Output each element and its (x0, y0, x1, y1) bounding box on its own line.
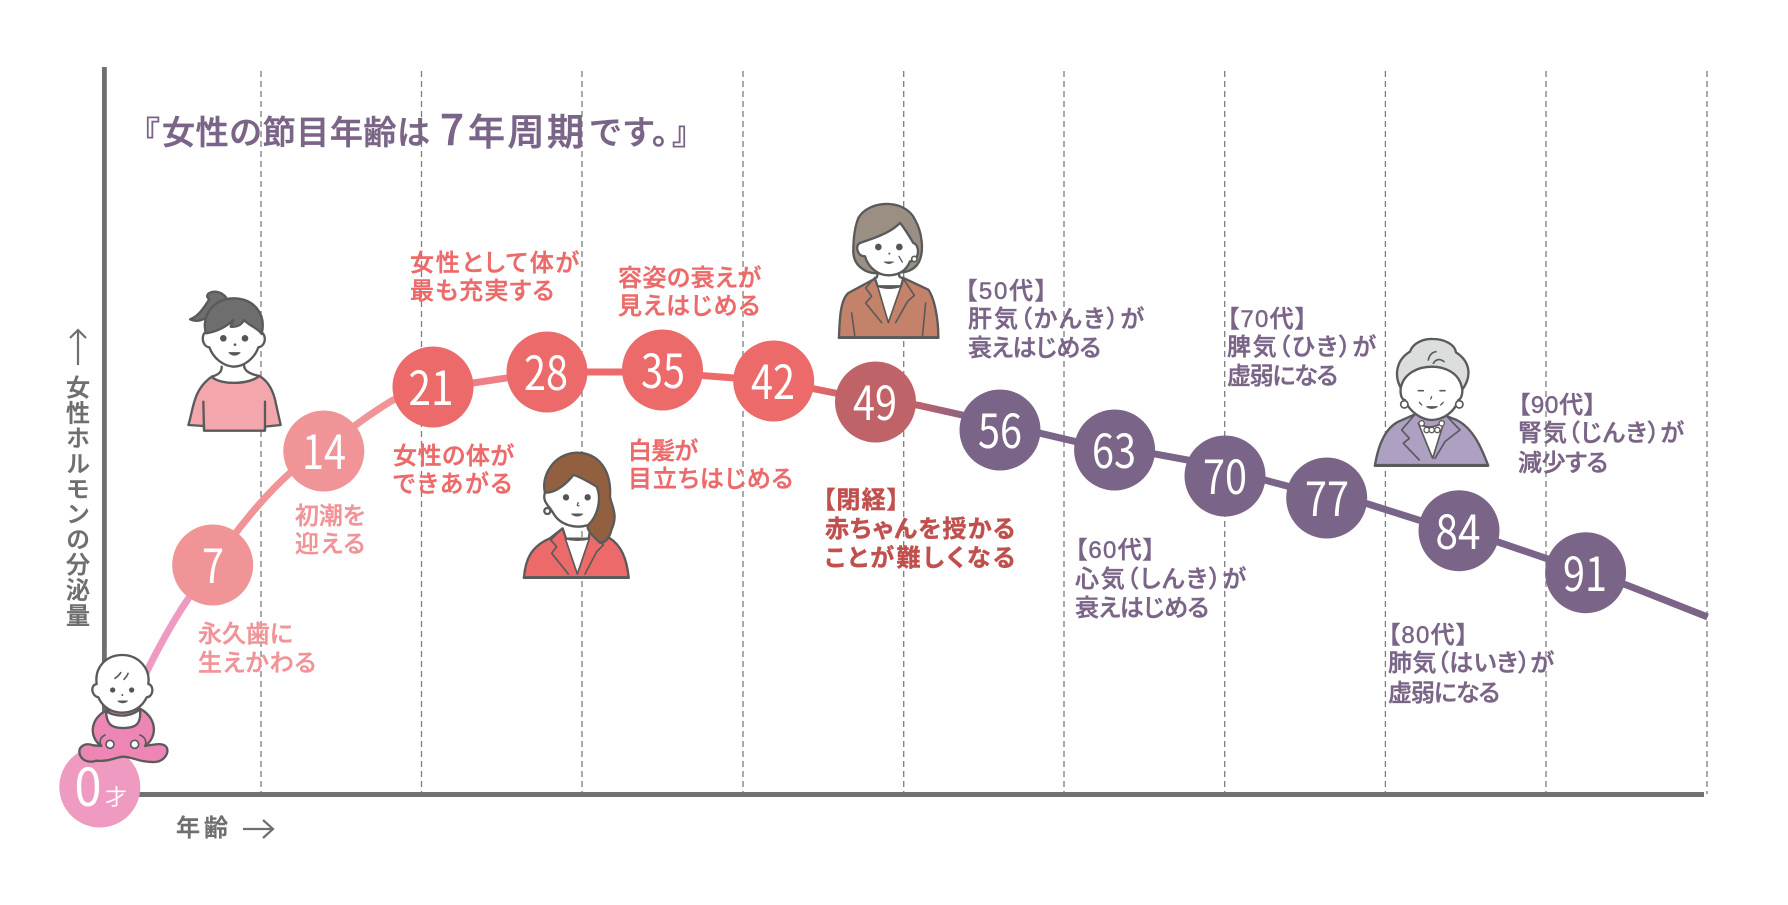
label: 50s (965, 278, 1144, 362)
age 0 node (59, 746, 140, 828)
icon: baby (79, 655, 167, 762)
age 49 node (835, 362, 916, 442)
icon: girl (188, 292, 281, 431)
age 0 node: 0 (74, 746, 102, 821)
age 35 node: 35 (641, 333, 685, 402)
hormone curve (99, 372, 1708, 787)
age 7 node: 7 (202, 528, 224, 597)
age 14 node: 14 (302, 414, 346, 483)
label: menopause: ことが難しくなる (825, 544, 1015, 572)
age 21 node (392, 346, 474, 428)
label: 80s: 【80代】 (1388, 622, 1468, 649)
x axis label: 年齢 (176, 808, 228, 843)
age 28 node: 28 (524, 335, 568, 404)
label: 60s: 【60代】 (1075, 537, 1155, 564)
label: 60s (1075, 537, 1246, 622)
age 49 node: 49 (853, 365, 897, 434)
label: 70s: 虚弱になる (1227, 363, 1338, 390)
age 70 node (1184, 436, 1266, 516)
label: age 35 bottom (628, 438, 793, 493)
label: 90s: 腎気（じんき）が (1518, 420, 1684, 447)
age 56 node (960, 390, 1040, 470)
title: 年周期 (468, 102, 584, 156)
age 42 node (733, 340, 814, 422)
y axis label: 女性ホルモンの分泌量 (60, 375, 96, 628)
label: age 28: 最も充実する (410, 278, 554, 305)
age 70 node: 70 (1203, 439, 1247, 508)
label: 50s: 【50代】 (965, 278, 1047, 305)
title: です。 (589, 106, 685, 154)
label: age 7 (198, 621, 316, 677)
label: age 21: 女性の体が (393, 443, 514, 470)
label: 70s: 脾気（ひき）が (1227, 334, 1376, 361)
label: age 14: 初潮を (295, 503, 365, 530)
label: 90s: 【90代】 (1518, 392, 1596, 419)
label: 80s (1388, 622, 1554, 707)
horizontal axis: age (100, 792, 1704, 797)
age 42 node: 42 (751, 344, 795, 413)
x axis label (176, 808, 273, 843)
title: 7 (440, 97, 464, 158)
vertical axis: hormone secretion (102, 67, 107, 797)
label: age 35 top (618, 265, 761, 320)
label: age 35 bottom: 白髪が (628, 438, 698, 465)
label: 80s: 虚弱になる (1388, 680, 1500, 707)
age 28 node (506, 332, 588, 412)
label: age 14 (295, 503, 365, 558)
label: 90s: 減少する (1518, 450, 1608, 477)
age 7 node (172, 524, 253, 606)
age 91 node: 91 (1563, 536, 1607, 605)
label: age 35 top: 容姿の衰えが (618, 265, 761, 292)
label: age 35 bottom: 目立ちはじめる (628, 466, 793, 493)
title: 』 (672, 108, 704, 154)
label: 50s: 衰えはじめる (968, 335, 1101, 362)
label: 70s (1227, 306, 1376, 390)
label: age 21: できあがる (393, 471, 512, 498)
label: age 28 (410, 250, 579, 305)
label: 60s: 心気（しんき）が (1075, 566, 1246, 593)
label: 60s: 衰えはじめる (1075, 595, 1209, 622)
label: age 14: 迎える (295, 531, 365, 558)
title: 『 (128, 108, 160, 154)
age 77 node: 77 (1305, 461, 1349, 530)
label: age 7: 永久歯に (198, 621, 293, 648)
label: 90s (1518, 392, 1684, 477)
age 77 node (1286, 458, 1367, 538)
label: age 35 top: 見えはじめる (618, 293, 760, 320)
title (128, 97, 704, 158)
label: 50s: 肝気（かんき）が (968, 306, 1144, 333)
age 63 node (1074, 410, 1155, 490)
age 91 node (1545, 532, 1626, 613)
age 35 node (622, 330, 703, 410)
age 84 node: 84 (1436, 494, 1480, 563)
label: age 21 (393, 443, 514, 498)
label: age 28: 女性として体が (410, 250, 579, 277)
label: 70s: 【70代】 (1227, 306, 1307, 333)
age 0 node: 才 (105, 780, 127, 812)
label: menopause: 赤ちゃんを授かる (825, 516, 1015, 543)
label: menopause (823, 487, 1015, 572)
icon: middle-aged woman (839, 204, 938, 338)
age 21 node: 21 (408, 350, 454, 419)
age 56 node: 56 (978, 393, 1022, 462)
label: menopause: 【閉経】 (823, 487, 899, 514)
age 84 node (1418, 490, 1500, 571)
title: 女性の節目年齢は (162, 106, 430, 154)
icon: elderly woman (1375, 339, 1488, 466)
age 63 node: 63 (1092, 413, 1136, 482)
label: age 7: 生えかわる (198, 650, 316, 677)
label: 80s: 肺気（はいき）が (1388, 650, 1554, 677)
age 14 node (283, 410, 364, 492)
icon: woman in red jacket (524, 453, 629, 578)
